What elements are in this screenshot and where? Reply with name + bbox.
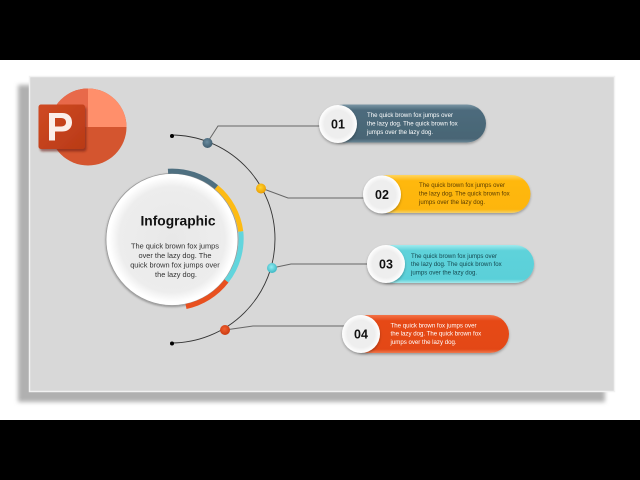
pill 03 [373,245,534,283]
pill 01 [325,104,486,142]
number circle 02 [363,176,401,214]
bottom black bar [0,420,640,480]
arc end point top [170,134,174,138]
connector arc [170,134,275,346]
text 02: The quick brown fox jumps over [419,182,505,189]
ring segment red [186,281,226,306]
number 01: 01 [331,118,345,132]
item 03 [367,245,534,283]
text 04: The quick brown fox jumps over [390,322,477,330]
pill 02 [369,175,530,213]
text 01: jumps over the lazy dog. [366,129,433,136]
text 03: The quick brown fox jumps over [411,253,497,260]
slide panel [30,76,614,392]
icon: PowerPoint logo [38,88,126,166]
ring segment blue [168,171,216,187]
pill 04 [348,315,509,353]
number 04: 04 [354,328,368,342]
number 03: 03 [379,258,393,272]
connector lines [207,126,370,330]
text 04: the lazy dog. The quick brown fox [390,330,481,338]
text 02: jumps over the lazy dog. [418,199,485,206]
text 01: the lazy dog. The quick brown fox [367,120,458,128]
number circle 03 [367,245,405,283]
item 02 [363,175,530,214]
central text: over the lazy dog. The [138,251,211,260]
text 03: the lazy dog. The quick brown fox [411,261,502,268]
node 03 [267,263,277,273]
heading: Infographic [140,214,216,228]
text 04: jumps over the lazy dog. [390,339,457,346]
item 01 [319,104,486,143]
number circle 04 [342,315,380,353]
central text: quick brown fox jumps over [130,260,220,270]
number 02: 02 [375,188,389,202]
node 04 [220,325,230,335]
central text: The quick brown fox jumps [131,242,219,250]
text 02: the lazy dog. The quick brown fox [419,190,510,198]
ring segment cyan [226,232,241,281]
number circle 01 [319,105,357,143]
node 02 [256,184,266,194]
top black bar [0,0,640,60]
item 04 [342,315,509,353]
text 01: The quick brown fox jumps over [367,112,453,119]
central circle [106,171,241,306]
central text: the lazy dog. [155,270,197,279]
arc end point bottom [170,342,174,346]
ring segment yellow [216,187,241,232]
slide panel shadow [18,85,605,402]
text 03: jumps over the lazy dog. [410,270,477,276]
node 01 [202,138,212,148]
